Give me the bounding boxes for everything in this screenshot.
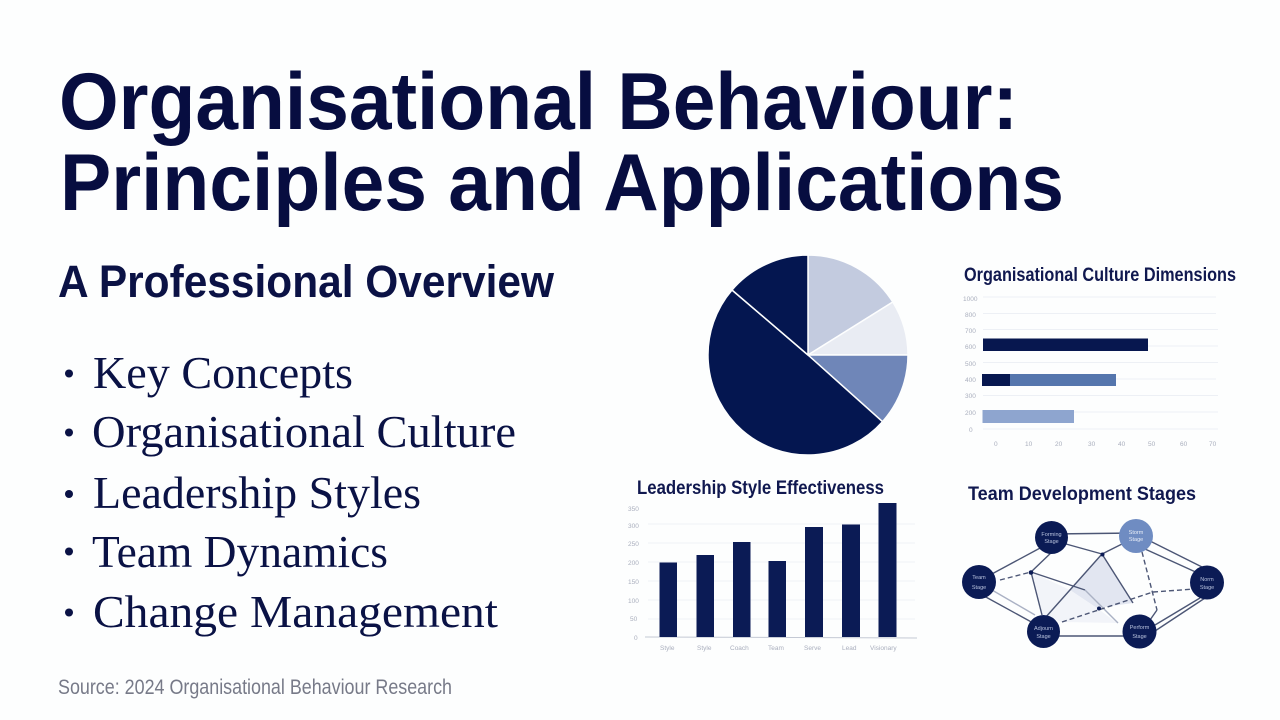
bullet list: Leadership Styles xyxy=(93,467,421,518)
axis labels: Style xyxy=(660,645,675,652)
stage nodes: Stage xyxy=(972,585,986,591)
chart: team development stages xyxy=(962,484,1224,648)
chart title: Team Development Stages xyxy=(968,484,1196,505)
axis labels: Style xyxy=(697,645,712,652)
axis labels: 200 xyxy=(628,560,639,567)
stage nodes: Stage xyxy=(1200,585,1214,591)
axis labels: 0 xyxy=(969,427,973,434)
axis labels: 70 xyxy=(1209,441,1217,448)
horizontal bars xyxy=(982,338,1148,423)
shaded area xyxy=(1070,554,1133,608)
axis labels: 700 xyxy=(965,328,976,335)
axis labels: 1000 xyxy=(963,296,978,303)
source note: Source: 2024 Organisational Behaviour Research xyxy=(58,676,452,699)
axis labels: 60 xyxy=(1180,441,1188,448)
pie chart xyxy=(708,255,908,455)
axis labels: 400 xyxy=(965,377,976,384)
stage nodes: Storm xyxy=(1129,530,1144,536)
chart title: Leadership Style Effectiveness xyxy=(637,478,884,499)
axis labels: 200 xyxy=(965,410,976,417)
vertical bars xyxy=(660,503,896,637)
axis labels: 50 xyxy=(1148,441,1156,448)
chart: organisational culture dimensions xyxy=(963,265,1236,448)
bullet list xyxy=(65,347,516,637)
axis labels xyxy=(963,296,1217,448)
stage nodes: Stage xyxy=(1132,634,1147,640)
axis labels: 40 xyxy=(1118,441,1126,448)
axis labels: 300 xyxy=(628,523,639,530)
title xyxy=(59,57,1064,228)
stage nodes: Adjourn xyxy=(1034,626,1053,632)
stage nodes: Team xyxy=(972,575,986,581)
stage nodes: Perform xyxy=(1130,625,1150,631)
axis labels: 50 xyxy=(630,616,638,623)
axis labels: Coach xyxy=(730,645,749,652)
stage nodes: Stage xyxy=(1129,537,1143,543)
axis labels: 30 xyxy=(1088,441,1096,448)
axis labels: Team xyxy=(768,645,784,652)
chart: leadership style effectiveness xyxy=(628,478,917,652)
axis labels: 250 xyxy=(628,541,639,548)
bullet list: Key Concepts xyxy=(93,347,353,398)
title: Organisational Behaviour: xyxy=(59,57,1018,147)
title: Principles and Applications xyxy=(60,138,1064,228)
small junction dots xyxy=(1029,552,1104,610)
chart title: Organisational Culture Dimensions xyxy=(964,265,1236,286)
stage nodes: Norm xyxy=(1200,577,1214,583)
subtitle: A Professional Overview xyxy=(58,256,555,307)
stage nodes xyxy=(962,519,1224,648)
stage nodes: Forming xyxy=(1041,532,1062,538)
axis labels: 20 xyxy=(1055,441,1063,448)
bullet list: Change Management xyxy=(93,586,498,637)
axis labels: 100 xyxy=(628,598,639,605)
axis labels: Lead xyxy=(842,645,857,652)
bullet list: Organisational Culture xyxy=(92,406,516,457)
axis labels: 10 xyxy=(1025,441,1033,448)
network links xyxy=(984,533,1205,636)
axis labels: 300 xyxy=(965,393,976,400)
axis labels: 800 xyxy=(965,312,976,319)
axis labels: 500 xyxy=(965,361,976,368)
axis labels: 600 xyxy=(965,344,976,351)
axis labels xyxy=(628,506,897,652)
axis labels: Visionary xyxy=(870,645,897,652)
axis labels: Serve xyxy=(804,645,821,652)
bullet list: Team Dynamics xyxy=(92,526,388,577)
axis labels: 150 xyxy=(628,579,639,586)
axis labels: 0 xyxy=(994,441,998,448)
axis line xyxy=(645,637,917,638)
stage nodes: Stage xyxy=(1044,539,1059,545)
axis labels: 350 xyxy=(628,506,639,513)
stage nodes: Stage xyxy=(1036,634,1051,640)
axis labels: 0 xyxy=(634,635,638,642)
